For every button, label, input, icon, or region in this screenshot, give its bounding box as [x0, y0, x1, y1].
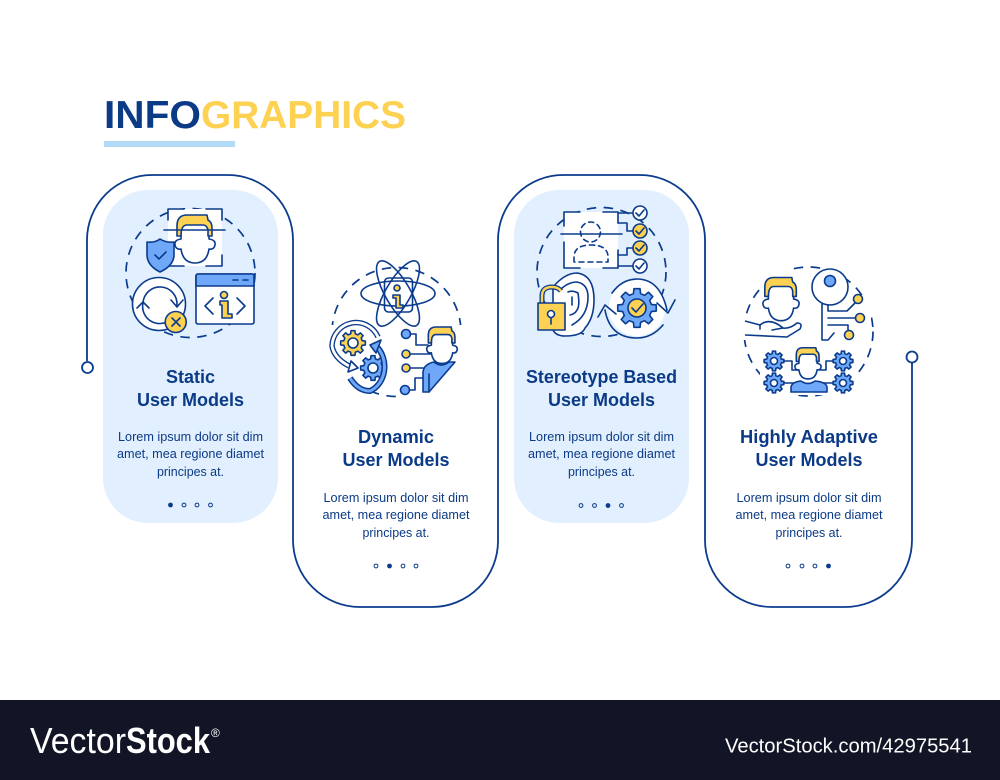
heading: User Models	[756, 450, 862, 470]
card 4: highly adaptive user models	[736, 267, 883, 568]
text block: Lorem ipsum dolor sit dim	[529, 430, 674, 444]
text block: amet, mea regione diamet	[736, 508, 883, 522]
heading	[740, 427, 878, 470]
heading: User Models	[137, 390, 244, 410]
heading: Dynamic	[358, 427, 434, 447]
heading: User Models	[548, 390, 655, 410]
heading: Static	[166, 367, 215, 387]
title: INFO	[104, 94, 201, 137]
text block: amet, mea regione diamet	[322, 508, 470, 522]
connecting serpentine outline	[82, 175, 918, 607]
text block: principes at.	[362, 526, 430, 540]
text block: amet, mea regione diamet	[117, 447, 265, 461]
footer logo: Vector	[30, 720, 126, 761]
text block: Lorem ipsum dolor sit dim	[324, 491, 468, 505]
card 1: static user models	[117, 208, 265, 507]
text block: principes at.	[776, 526, 842, 540]
panel background: stereotype based user models	[514, 190, 689, 523]
text block	[117, 430, 265, 479]
text block: principes at.	[157, 465, 224, 479]
card 2: dynamic user models	[322, 255, 470, 568]
pagination dots	[374, 564, 418, 568]
icon: profile scan, ear with lock and gear check	[537, 206, 675, 338]
pagination dots	[579, 503, 623, 508]
footer logo	[30, 720, 220, 761]
text block: amet, mea regione diamet	[528, 447, 676, 461]
panel background: static user models	[103, 190, 278, 523]
footer bar	[0, 700, 1000, 780]
heading: Highly Adaptive	[740, 427, 878, 447]
text block	[736, 491, 883, 540]
heading	[137, 367, 244, 410]
text block	[322, 491, 470, 540]
card 3: stereotype based user models	[526, 206, 677, 508]
footer logo: ®	[211, 726, 220, 740]
heading: Stereotype Based	[526, 367, 677, 387]
title: GRAPHICS	[201, 94, 406, 137]
pagination dots	[786, 564, 831, 568]
text block: Lorem ipsum dolor sit dim	[736, 491, 882, 505]
icon: atom, gears and connected user	[328, 255, 462, 397]
footer image id: VectorStock.com/42975541	[725, 736, 972, 758]
text block	[528, 430, 676, 479]
icon: user in hand, digital key and gears	[742, 267, 873, 396]
heading	[342, 427, 450, 470]
icon: face scan, shield, sync and info window	[126, 208, 255, 338]
text block: principes at.	[568, 465, 635, 479]
title	[104, 94, 406, 147]
heading	[526, 367, 677, 410]
heading: User Models	[342, 450, 450, 470]
text block: Lorem ipsum dolor sit dim	[118, 430, 263, 444]
pagination dots	[168, 503, 212, 507]
footer logo: Stock	[126, 720, 211, 761]
